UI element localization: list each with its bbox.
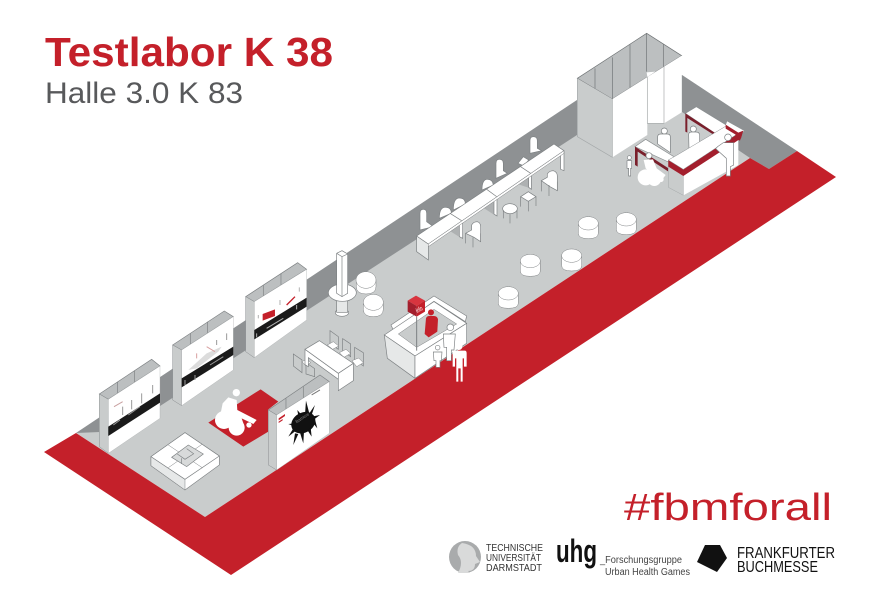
booth top xyxy=(384,302,467,356)
logo: Frankfurter Buchmesse: FRANKFURTER xyxy=(737,545,835,562)
rear counter arm xyxy=(685,107,733,137)
counter left end xyxy=(668,161,683,195)
person behind counter xyxy=(658,128,670,153)
info booth, pillar, table xyxy=(293,251,467,391)
logo: TU Darmstadt: TECHNISCHE xyxy=(486,543,543,554)
high desks and chairs xyxy=(417,137,636,308)
starburst poster: Barriere xyxy=(294,411,311,424)
red strip xyxy=(668,130,743,176)
person behind counter 2 xyxy=(689,126,700,150)
logo: Frankfurter Buchmesse: BUCHMESSE xyxy=(737,559,818,576)
small child figure xyxy=(627,156,632,176)
front face xyxy=(683,139,738,195)
booth back wall xyxy=(391,296,467,330)
display panels and rug xyxy=(99,263,329,490)
stool 4 xyxy=(578,217,598,239)
floor xyxy=(76,75,797,517)
stool 1 xyxy=(498,287,518,308)
back wall left end xyxy=(76,417,100,433)
back wall xyxy=(100,100,577,445)
red rug xyxy=(208,389,278,447)
display panel 1 xyxy=(99,359,160,453)
stool 5 xyxy=(616,213,636,235)
red person xyxy=(425,309,438,337)
desk top xyxy=(417,144,564,244)
desk left end xyxy=(417,236,428,260)
small square table xyxy=(521,192,536,201)
man at counter xyxy=(716,134,734,176)
hashtag: #fbmforall xyxy=(624,487,832,529)
small round table xyxy=(503,204,517,214)
visitor child xyxy=(433,345,442,367)
chairs behind desks xyxy=(420,209,433,230)
stool 2 xyxy=(520,254,540,276)
desk legs xyxy=(459,152,564,238)
left counter arm xyxy=(635,139,675,162)
pole xyxy=(415,317,418,351)
visitor front xyxy=(453,343,467,382)
booth right face xyxy=(415,323,467,378)
chairs behind table xyxy=(293,331,363,377)
logo: uhg xyxy=(556,533,690,578)
title: Testlabor K 38 xyxy=(45,29,333,75)
logo: Frankfurter Buchmesse xyxy=(697,545,835,576)
table xyxy=(305,341,353,391)
info cube xyxy=(408,296,425,317)
wheelchair figure xyxy=(215,389,257,436)
logo: TU Darmstadt xyxy=(449,541,543,574)
wheelchair user xyxy=(638,153,666,186)
visitor tall xyxy=(443,324,455,361)
display panel 2 xyxy=(173,311,233,406)
logo: TU Darmstadt: UNIVERSITÄT xyxy=(486,552,541,564)
booth left face xyxy=(384,335,415,378)
cabin xyxy=(577,33,682,157)
pillar base xyxy=(335,309,349,316)
pillar disc xyxy=(328,284,356,301)
counter with red trim xyxy=(627,107,744,195)
white floor block table xyxy=(151,433,219,490)
subtitle: hall and stand: Halle 3.0 K 83 xyxy=(45,77,243,110)
stool front xyxy=(363,294,383,317)
front chairs xyxy=(466,222,481,242)
pillar column xyxy=(337,251,348,297)
logo: uhg: uhg xyxy=(556,533,597,569)
display panel 3 xyxy=(246,263,307,358)
back wall right xyxy=(682,75,797,169)
logo: TU Darmstadt: DARMSTADT xyxy=(486,563,542,574)
red carpet xyxy=(44,151,836,575)
info cube: info xyxy=(415,305,424,315)
desk shadows xyxy=(448,221,462,238)
logo: uhg: Urban Health Games xyxy=(605,567,690,578)
logo: uhg: _Forschungsgruppe xyxy=(599,555,682,566)
display panel 4 xyxy=(268,375,329,470)
stool 3 xyxy=(562,249,582,271)
stool back xyxy=(356,272,376,294)
counter end block xyxy=(726,121,744,137)
front counter top xyxy=(668,127,742,169)
